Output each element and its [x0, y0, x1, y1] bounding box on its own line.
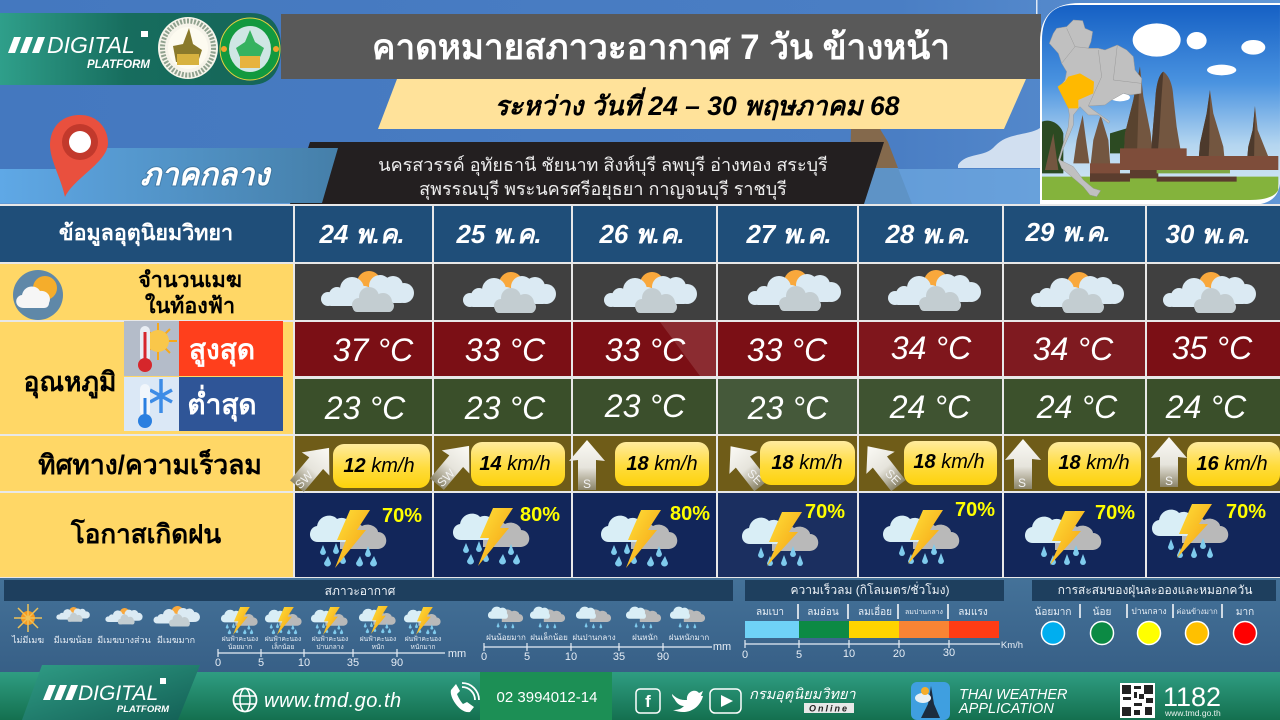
legend: weather conditions: มีเมฆบางส่วน [97, 635, 151, 645]
legend: dust and haze: มาก [1236, 607, 1254, 618]
icon: location pin [50, 115, 108, 197]
legend: dust and haze: น้อยมาก [1035, 606, 1071, 618]
map of Thailand [1049, 20, 1142, 197]
legend: weather conditions: 10 [565, 651, 577, 663]
social media: กรมอุตุนิยมวิทยา [749, 687, 856, 703]
icons: partly cloudy [321, 270, 1256, 313]
arrows: wind direction [283, 434, 1187, 498]
legend: weather conditions: ฝนหนัก [632, 633, 658, 642]
legend: wind speed: 5 [796, 649, 802, 661]
legend: wind speed: ลมแรง [958, 607, 988, 618]
label: maximum [179, 321, 283, 376]
row: cloud cover [0, 264, 1280, 320]
row: cloud cover: จำนวนเมฆ [138, 268, 242, 292]
row: wind [0, 434, 1280, 498]
legend: dust and haze [1032, 580, 1276, 644]
footer logo: PLATFORM [117, 704, 170, 715]
phone: 02 3994012-14 [497, 689, 597, 706]
row: wind: ทิศทาง/ความเร็วลม [38, 448, 262, 480]
legend: weather conditions: มีเมฆน้อย [54, 635, 92, 645]
background [0, 0, 1280, 210]
province panel: นครสวรรค์ อุทัยธานี ชัยนาท สิงห์บุรี ลพบุรี อ่างทอง สระบุรี [378, 155, 828, 176]
legend: wind speed: ลมเอื่อย [858, 604, 892, 618]
app [911, 682, 1068, 720]
row: maximum temperature: 34 °C [1033, 331, 1114, 367]
row: minimum temperature: 23 °C [324, 390, 406, 426]
arrows: wind direction: S [1165, 474, 1173, 488]
row: dates: 30 พ.ค. [1165, 219, 1251, 249]
wind speed badges: 18 km/h [1058, 452, 1130, 474]
legend: weather conditions: 5 [524, 651, 530, 663]
arrows: wind direction: SE [882, 466, 904, 488]
legend: wind speed: 20 [893, 648, 905, 660]
legend: weather conditions: เล็กน้อย [272, 642, 294, 651]
legend: weather conditions: 35 [613, 651, 625, 663]
region band [0, 148, 338, 203]
forecast table [0, 204, 1280, 579]
label: minimum: ต่ำสุด [187, 384, 257, 422]
wind speed badges: 14 km/h [479, 453, 551, 475]
row: rain chance: 70% [1226, 501, 1266, 523]
social media: Online [809, 704, 849, 714]
row: dates: 29 พ.ค. [1024, 217, 1111, 247]
legend: weather conditions: ฝนฟ้าคะนอง [312, 635, 348, 643]
map and temple photo [1040, 3, 1280, 205]
label: maximum: สูงสุด [189, 334, 255, 367]
legend: weather conditions: ฝนหนักมาก [669, 633, 709, 642]
legend: weather conditions [4, 580, 733, 669]
row: minimum temperature: 24 °C [1036, 389, 1118, 425]
title bar: คาดหมายสภาวะอากาศ 7 วัน ข้างหน้า [372, 28, 950, 67]
legend: wind speed: Km/h [1001, 640, 1023, 651]
icon: cold thermometer [124, 377, 179, 431]
legend: wind speed: ลมเบา [756, 607, 784, 618]
app: APPLICATION [958, 701, 1054, 717]
legend: wind speed: 10 [843, 648, 855, 660]
legend: weather conditions: ฝนฟ้าคะนอง [265, 635, 301, 643]
row: maximum temperature: 34 °C [891, 330, 972, 366]
legend: weather conditions: 90 [391, 657, 403, 669]
region band: ภาคกลาง [141, 157, 272, 192]
legend: weather conditions: 10 [298, 657, 310, 669]
row: dates: 27 พ.ค. [745, 219, 832, 249]
arrows: wind direction: S [1018, 476, 1026, 490]
row: minimum temperature: 24 °C [889, 389, 971, 425]
hotline and QR code: www.tmd.go.th [1164, 708, 1221, 718]
legend: dust and haze: ค่อนข้างมาก [1176, 607, 1218, 616]
legend: weather conditions: ฝนฟ้าคะนอง [360, 635, 396, 643]
legend: wind speed: ลมอ่อน [807, 607, 839, 618]
arrows: wind direction: SW [434, 466, 458, 490]
social media [636, 687, 856, 714]
footer logo [22, 665, 200, 720]
wind speed badges: 18 km/h [626, 453, 698, 475]
legend: wind speed: ลมปานกลาง [905, 609, 943, 616]
icon: cloud cover [13, 270, 63, 320]
legend: weather conditions: สภาวะอากาศ [325, 584, 396, 598]
legend: weather conditions: mm [713, 641, 731, 653]
legend: weather conditions: ไม่มีเมฆ [11, 635, 44, 645]
wind speed badges: 12 km/h [343, 455, 415, 477]
row: maximum temperature: 37 °C [333, 332, 414, 368]
row: rain chance: 80% [520, 504, 560, 526]
arrows: wind direction: SE [744, 466, 766, 488]
wind speed badges: 16 km/h [1196, 453, 1268, 475]
legend: weather conditions: ฝนฟ้าคะนอง [405, 635, 441, 643]
date ribbon: ระหว่าง วันที่ 24 – 30 พฤษภาคม 68 [495, 87, 900, 121]
row: maximum temperature: 33 °C [465, 332, 546, 368]
legend: dust and haze: ปานกลาง [1131, 606, 1167, 616]
arrows: wind direction: S [583, 477, 591, 491]
temple photo [1042, 5, 1280, 200]
social media: f [645, 692, 651, 711]
legend: wind speed: 0 [742, 649, 748, 661]
row: minimum temperature [124, 377, 1280, 434]
row: dates: 25 พ.ค. [455, 219, 542, 249]
row: dates: 26 พ.ค. [598, 219, 685, 249]
digital platform logo: PLATFORM [87, 59, 150, 71]
legend: weather conditions: น้อยมาก [228, 643, 252, 651]
row: cloud cover: ในท้องฟ้า [145, 292, 235, 318]
row: maximum temperature: 33 °C [605, 332, 686, 368]
row: dates: ข้อมูลอุตุนิยมวิทยา [59, 221, 233, 247]
row: maximum temperature [0, 321, 1280, 434]
legend: weather conditions: ฝนน้อยมาก [486, 633, 526, 642]
digital platform logo: DIGITAL [47, 32, 135, 58]
row: minimum temperature: 23 °C [604, 388, 686, 424]
row: maximum temperature: 33 °C [747, 332, 828, 368]
app: THAI WEATHER [959, 687, 1068, 703]
wind speed badges [333, 441, 1280, 488]
legend: wind speed [742, 580, 1023, 661]
legend: weather conditions: mm [448, 648, 466, 660]
legend: wind speed: 30 [943, 647, 955, 659]
row: rain chance: 70% [805, 501, 845, 523]
legend: weather conditions: หนักมาก [411, 643, 435, 651]
row: dates: 24 พ.ค. [318, 219, 405, 249]
footer [0, 665, 1280, 720]
row: rain chance: 70% [382, 505, 422, 527]
row: minimum temperature: 23 °C [464, 390, 546, 426]
legend: weather conditions: 0 [215, 657, 221, 669]
website: www.tmd.go.th [264, 690, 402, 712]
legend: dust and haze: การสะสมของฝุ่นละอองและหมอกควัน [1058, 583, 1252, 598]
row: dates [0, 206, 1280, 262]
row: dates: 28 พ.ค. [884, 219, 971, 249]
legend: weather conditions: 5 [258, 657, 264, 669]
legend: weather conditions: ฝนเล็กน้อย [530, 632, 568, 642]
province panel [290, 142, 884, 204]
row: minimum temperature: 23 °C [747, 390, 829, 426]
row: maximum temperature: อุณหภูมิ [24, 367, 116, 399]
legend: weather conditions: ฝนปานกลาง [572, 633, 616, 642]
row: minimum temperature: 24 °C [1165, 389, 1247, 425]
ministry seal [158, 17, 218, 79]
legend: weather conditions: ปานกลาง [316, 644, 344, 651]
title bar [281, 14, 1041, 79]
wind speed badges: 18 km/h [913, 451, 985, 473]
legend: weather conditions: 90 [657, 651, 669, 663]
row: rain chance: 70% [1095, 502, 1135, 524]
row: maximum temperature: 35 °C [1172, 330, 1253, 366]
legend: weather conditions: 35 [347, 657, 359, 669]
header logo pill [0, 13, 281, 85]
province panel: สุพรรณบุรี พระนครศรีอยุธยา กาญจนบุรี ราชบุรี [419, 179, 787, 200]
icon: hot thermometer [124, 321, 179, 376]
icon: clear sky [14, 604, 42, 632]
legend: weather conditions: หนัก [372, 643, 384, 651]
legend: weather conditions: 0 [481, 651, 487, 663]
legend [0, 578, 1280, 674]
icons: thunderstorm [310, 504, 1228, 568]
legend: weather conditions: ฝนฟ้าคะนอง [222, 635, 258, 643]
footer logo: DIGITAL [78, 682, 158, 705]
row: rain chance: โอกาสเกิดฝน [70, 518, 221, 549]
arrows: wind direction: SW [292, 468, 316, 492]
wind speed badges: 18 km/h [771, 452, 843, 474]
legend: dust and haze: น้อย [1093, 606, 1111, 618]
phone [451, 672, 612, 720]
meteorological department seal [220, 18, 280, 80]
legend: wind speed: ความเร็วลม (กิโลเมตร/ชั่วโมง) [790, 581, 950, 597]
hotline and QR code: 1182 [1163, 682, 1221, 712]
digital platform logo [8, 31, 150, 71]
date ribbon [378, 79, 1026, 129]
legend: weather conditions: มีเมฆมาก [157, 635, 195, 645]
row: rain chance: 80% [670, 503, 710, 525]
label: minimum [179, 377, 283, 431]
row: rain chance [0, 493, 1280, 577]
row: rain chance: 70% [955, 499, 995, 521]
hotline and QR code [1120, 682, 1221, 718]
